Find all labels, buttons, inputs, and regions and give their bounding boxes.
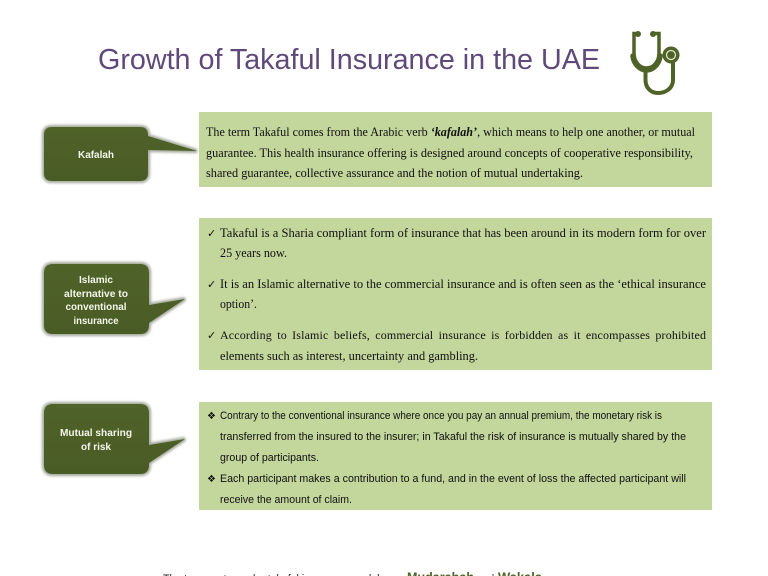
panel: Sharia compliance text box <box>199 218 712 370</box>
panel: risk sharing text box: group of participants. <box>220 452 319 464</box>
panel: Islamic alternative callout: conventional <box>66 301 127 313</box>
panel: Kafalah callout <box>44 127 197 181</box>
panel: Sharia compliance text box: ✓ <box>207 329 216 342</box>
panel: Islamic alternative callout: insurance <box>74 315 119 327</box>
panel: risk sharing text box: ❖ <box>207 411 216 422</box>
footer text cut off by page edge <box>163 569 542 576</box>
panel: definition text box: shared guarantee, collective assurance and the notion of mutual undertaking. <box>206 166 583 180</box>
panel: Kafalah callout: Kafalah <box>78 149 114 161</box>
panel: risk sharing text box: ❖ <box>207 474 216 485</box>
panel: definition text box: guarantee. This health insurance offering is designed around concepts of cooperative responsibility, <box>206 146 693 160</box>
panel: Islamic alternative callout <box>44 264 185 334</box>
panel: Sharia compliance text box: According to Islamic beliefs, commercial insurance is forbidden as it encompasses prohibited <box>220 328 706 342</box>
panel: definition text box <box>199 112 712 187</box>
panel: risk sharing text box <box>199 402 712 510</box>
panel: Sharia compliance text box: elements such as interest, uncertainty and gambling. <box>220 349 478 363</box>
panel: Sharia compliance text box: It is an Islamic alternative to the commercial insurance and is often seen as the ‘ethical insurance <box>220 277 707 291</box>
panel: Sharia compliance text box: 25 years now. <box>220 246 287 260</box>
panel: Islamic alternative callout: Islamic <box>79 274 113 286</box>
panel: Mutual sharing callout: of risk <box>81 441 111 453</box>
panel: Sharia compliance text box: option’. <box>220 297 257 311</box>
panel: Sharia compliance text box: Takaful is a Sharia compliant form of insurance that has been around in its modern form for over <box>220 226 706 240</box>
panel: risk sharing text box: receive the amount of claim. <box>220 494 352 506</box>
panel: risk sharing text box: transferred from the insured to the insurer; in Takaful the risk of insurance is mutually shared by the <box>220 431 686 443</box>
panel: Sharia compliance text box: ✓ <box>207 227 216 240</box>
panel: Mutual sharing callout <box>44 404 185 474</box>
panel: definition text box: The term Takaful comes from the Arabic verb ‘kafalah’, which means to help one another, or mutual <box>206 125 696 139</box>
panel: Mutual sharing callout: Mutual sharing <box>60 427 132 439</box>
icon: stethoscope <box>633 31 680 93</box>
panel: Sharia compliance text box: ✓ <box>207 278 216 291</box>
panel: risk sharing text box: Contrary to the conventional insurance where once you pay an annual premium, the monetary risk is <box>220 410 662 422</box>
panel: risk sharing text box: Each participant makes a contribution to a fund, and in the event of loss the affected participant will <box>220 473 686 485</box>
panel: Islamic alternative callout: alternative to <box>64 288 128 300</box>
title: Growth of Takaful Insurance in the UAE <box>98 44 600 76</box>
